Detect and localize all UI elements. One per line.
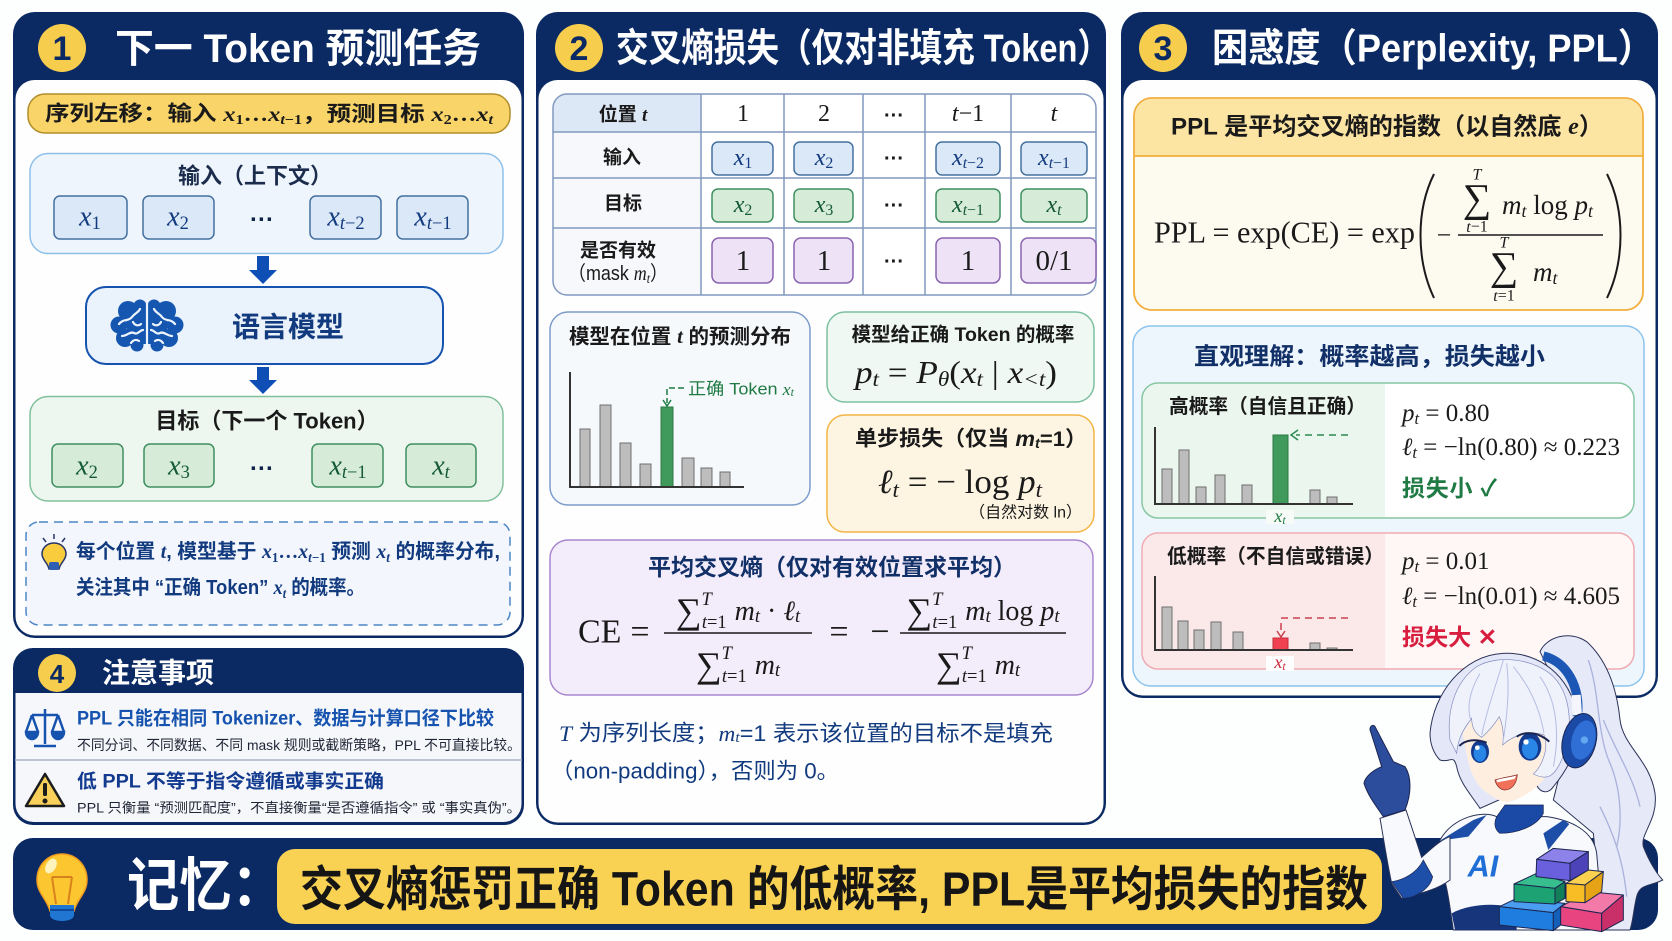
high probability values: = −ln(0.80) ≈ 0.223 (1417, 434, 1620, 460)
panel 1 number badge: 1 (53, 30, 71, 68)
high probability values: p (1400, 400, 1414, 426)
mascot raised arm (1380, 810, 1450, 898)
formula: cross entropy: log (991, 596, 1040, 626)
panel 4 heading: 注意事项 (102, 658, 214, 688)
input token x2: 2 (180, 213, 189, 233)
panel 1 number badge (38, 24, 86, 72)
note row 1 (26, 706, 521, 753)
PPL definition card (1134, 98, 1643, 310)
note line 1: 预测 (326, 540, 376, 563)
single step loss card: p (1016, 464, 1036, 500)
target token x3 (144, 444, 214, 487)
target token x2 (52, 444, 123, 487)
note line 2: 关注其中 “正确 Token” x (76, 577, 285, 599)
formula: cross entropy: ∑ (906, 591, 932, 631)
shift-left callout pill: 序列左移：输入 x (45, 102, 234, 126)
table row: target: ··· (884, 195, 904, 217)
prediction distribution card (550, 312, 810, 505)
yellow block (1566, 870, 1603, 903)
shift-left callout pill: t (280, 112, 286, 126)
high probability values: ℓ (1402, 434, 1413, 460)
single step loss card: =1） (1040, 428, 1087, 450)
input token x2 (143, 196, 214, 239)
table row: position: t−1 (952, 101, 984, 127)
correct token annotation: t (791, 387, 795, 399)
panel 3 number badge: 3 (1154, 30, 1172, 68)
shift-left callout pill: −1 (285, 112, 302, 126)
arrow: high probability pointer (1291, 430, 1348, 440)
note line 1: 每个位置 t, 模型基于 x (76, 541, 272, 563)
table row: input: x (734, 145, 744, 171)
target ellipsis: ··· (250, 456, 274, 482)
formula: cross entropy: =1 (967, 666, 987, 686)
input token x1: 1 (92, 213, 101, 233)
formula: cross entropy: T (722, 643, 734, 663)
table row: input: ··· (884, 148, 904, 170)
low probability values: ℓ (1402, 582, 1413, 610)
correct token probability card: t (873, 367, 880, 391)
table row: target: x (734, 192, 744, 218)
panel 1: next token prediction (13, 12, 524, 638)
high probability values: 损失小 ✓ (1402, 475, 1497, 501)
formula: PPL exponential: − (1437, 220, 1451, 250)
table row: mask: ） (650, 262, 668, 285)
formula: PPL exponential: m (1502, 190, 1522, 220)
high probability values: t (1414, 408, 1420, 428)
pink block (1561, 892, 1623, 932)
table row: target: 2 (744, 202, 752, 218)
table row: position: 1 (737, 101, 749, 127)
formula: cross entropy: m (995, 650, 1015, 680)
formula: cross entropy: = (630, 614, 650, 650)
input token x t-1 (397, 196, 468, 239)
input token x t-2: x (327, 202, 340, 232)
formula: cross entropy: ℓ (783, 596, 795, 626)
formula: PPL exponential: log (1526, 190, 1574, 220)
panel 4 number badge (38, 654, 76, 692)
mascot: anime AI assistant (1364, 636, 1663, 932)
table row: input: 输入 (603, 146, 641, 168)
memory statement highlight (277, 849, 1382, 924)
target token x t: t (445, 462, 451, 482)
PPL definition card: PPL 是平均交叉熵的指数（以自然底 e） (1171, 112, 1603, 140)
mascot torso (1440, 814, 1603, 930)
prediction distribution card: 模型在位置 t 的预测分布 (569, 324, 791, 348)
formula: cross entropy: T (962, 643, 974, 663)
formula: cross entropy: CE (578, 614, 621, 650)
panel 2: cross entropy (536, 12, 1110, 825)
target token x2: 2 (89, 462, 98, 482)
table row: position: t (1051, 101, 1059, 127)
formula: PPL exponential: t=1 (1493, 288, 1515, 304)
correct token annotation: 正确 Token x (688, 380, 790, 398)
formula: cross entropy: − (870, 614, 890, 650)
mascot head (1430, 653, 1602, 808)
shift-left callout pill: ，预测目标 (302, 102, 431, 126)
correct token probability card: p (855, 354, 871, 390)
table row: position: 2 (818, 101, 830, 127)
formula: cross entropy: t (932, 612, 938, 632)
note line 1: 1 (272, 550, 278, 564)
formula: cross entropy (578, 589, 1066, 686)
formula: cross entropy: t (1054, 606, 1060, 626)
note row 2 (26, 770, 521, 816)
single step loss card: t (1035, 435, 1041, 451)
input token x t-2 (310, 196, 381, 239)
target token x3: x (168, 450, 181, 482)
low probability case: 低概率（不自信或错误） (1167, 544, 1384, 568)
intuition card (1133, 326, 1644, 686)
formula: PPL exponential: ∑ (1490, 244, 1518, 288)
table row: position (599, 101, 1059, 127)
formula: cross entropy: t (775, 660, 781, 680)
high probability case (1142, 383, 1634, 527)
panel 4: notes (13, 648, 524, 825)
table row: position: ··· (884, 105, 904, 127)
low probability values: t (1414, 556, 1420, 576)
formula: PPL exponential: ∑ (1463, 176, 1491, 220)
note line 1: t (386, 550, 390, 564)
dashed explanation note (26, 522, 510, 625)
panel 1 heading: 下一 Token 预测任务 (115, 27, 481, 71)
formula: cross entropy: t (722, 666, 728, 686)
mascot pointing glove (1364, 725, 1410, 817)
formula: PPL exponential: t (1552, 268, 1558, 288)
table row: mask: （mask m (568, 263, 648, 285)
formula: cross entropy: m (755, 650, 775, 680)
bar chart: low probability (1155, 576, 1353, 650)
input ellipsis: ··· (250, 206, 274, 234)
formula: PPL exponential (1154, 166, 1620, 304)
table row: target: t (963, 202, 968, 218)
memory label: 记忆： (127, 854, 284, 918)
note line 1: 的概率分布, (390, 540, 500, 563)
formula: PPL exponential: PPL = exp(CE) = exp (1154, 214, 1415, 250)
note 1 heading: PPL 只能在相同 Tokenizer、数据与计算口径下比较 (77, 706, 494, 730)
shift-left callout pill: x (267, 102, 280, 126)
language model box (86, 287, 443, 364)
table row: input: 1 (744, 154, 752, 172)
panel 4 number badge: 4 (50, 659, 65, 689)
correct token probability card: x (1008, 354, 1022, 390)
formula: PPL exponential: t (1522, 201, 1528, 221)
table row: target: −1 (967, 202, 984, 218)
single step loss card: （自然对数 ln） (969, 504, 1082, 522)
mascot mouth (1495, 775, 1517, 790)
shift-left callout pill: … (244, 102, 268, 126)
correct token probability card (827, 312, 1094, 402)
correct token probability card: | (983, 354, 1008, 390)
icon: brain (110, 300, 184, 352)
formula: PPL exponential: t (1588, 201, 1594, 221)
shift-left callout pill: x (475, 102, 488, 126)
table row: mask: 1 (817, 245, 831, 277)
correct token probability card: t (977, 367, 984, 391)
target token x t-1 (312, 444, 383, 487)
formula: PPL exponential: T (1473, 166, 1483, 184)
target token x2: x (76, 450, 89, 482)
table row: input: −1 (1053, 154, 1070, 172)
table row: target: x (1046, 192, 1057, 218)
definition note (551, 720, 1053, 784)
definition note: T 为序列长度； m (559, 720, 734, 746)
formula: PPL exponential: T (1500, 234, 1510, 252)
alignment table (553, 94, 1096, 295)
table row: target: x (815, 192, 825, 218)
single step loss card: 单步损失（仅当 m (855, 428, 1034, 450)
correct token probability card: x (961, 354, 975, 390)
icon: balance scale (26, 709, 64, 746)
formula: cross entropy: ∑ (696, 645, 722, 685)
shift-left callout pill: 2 (444, 112, 452, 126)
note line 1: x (297, 541, 308, 563)
high probability values (1400, 400, 1620, 501)
note line 1: t (308, 550, 312, 564)
input token x t-2: −2 (345, 213, 365, 233)
panel 2 number badge (555, 24, 603, 72)
high probability values: t (1412, 442, 1417, 462)
table row: target (604, 189, 1087, 222)
formula: cross entropy: t (795, 606, 801, 626)
formula: PPL exponential: m (1533, 257, 1552, 287)
shift-left callout pill: 1 (236, 112, 244, 126)
input context group: 输入（上下文） (178, 164, 332, 188)
formula: cross entropy: t (702, 612, 708, 632)
note 1 detail: 不同分词、不同数据、不同 mask 规则或截断策略，PPL 不可直接比较。 (77, 737, 521, 753)
correct token probability card: = (879, 354, 916, 390)
formula: PPL exponential: p (1572, 190, 1588, 220)
mascot headset (1543, 656, 1602, 772)
table row: target: 3 (825, 202, 833, 218)
formula: cross entropy: ∑ (936, 645, 962, 685)
table row: mask: ··· (884, 251, 904, 273)
memory statement highlight: 交叉熵惩罚正确 Token 的低概率, PPL是平均损失的指数 (300, 864, 1368, 916)
formula: cross entropy: =1 (938, 612, 957, 632)
input token x t-1: −1 (432, 213, 452, 233)
note line 1: −1 (312, 550, 326, 564)
x t axis label red: x (1274, 652, 1282, 672)
high probability case: 高概率（自信且正确） (1169, 394, 1366, 418)
bottom memory banner (13, 838, 1658, 930)
average cross entropy card: 平均交叉熵（仅对有效位置求平均） (648, 554, 1016, 580)
model label: 语言模型 (232, 312, 344, 342)
input token x t-2: t (340, 213, 346, 233)
target group (30, 396, 503, 501)
single step loss card: = − log (899, 464, 1018, 500)
formula: cross entropy: =1 (707, 612, 727, 632)
low probability values: 损失大 ✕ (1402, 624, 1497, 650)
low probability values (1400, 548, 1620, 650)
definition note: （non-padding），否则为 0。 (551, 758, 839, 784)
formula: cross entropy: = (829, 614, 849, 650)
input token x1: x (79, 202, 92, 232)
note 2 detail: PPL 只衡量 “预测匹配度”，不直接衡量“是否遵循指令” 或 “事实真伪”。 (77, 800, 521, 816)
table row: input: 2 (825, 154, 833, 172)
formula: cross entropy: m (965, 596, 985, 626)
formula: cross entropy: ∑ (676, 591, 702, 631)
table row: mask: 1 (961, 245, 975, 277)
average cross entropy card (550, 540, 1093, 695)
low probability values: = −ln(0.01) ≈ 4.605 (1417, 582, 1620, 610)
table row: target: t (1057, 202, 1062, 218)
shift-left callout pill (28, 94, 510, 133)
formula: cross entropy: m (735, 596, 755, 626)
table row: mask (568, 238, 1096, 286)
panel 2 heading: 交叉熵损失（仅对非填充 Token） (616, 28, 1110, 70)
table row: input: t (1049, 154, 1054, 172)
target token x t-1: x (329, 450, 342, 482)
panel 2 number badge: 2 (570, 30, 588, 68)
target token x t-1: −1 (347, 462, 367, 482)
formula: cross entropy: t (962, 666, 968, 686)
formula: cross entropy: T (932, 589, 944, 609)
table row: input: x (952, 145, 963, 171)
input token x t-1: x (414, 202, 427, 232)
table row: input: x (815, 145, 825, 171)
correct token annotation (663, 380, 795, 406)
x t axis label red (1266, 652, 1294, 673)
formula: cross entropy: t (755, 606, 761, 626)
bar chart: predicted distribution (570, 372, 744, 487)
green block (1514, 873, 1565, 904)
input context group (30, 154, 503, 254)
panel 3: perplexity (1121, 12, 1658, 698)
shift-left callout pill: t (488, 112, 494, 126)
formula: cross entropy: =1 (727, 666, 747, 686)
x t axis label green (1266, 506, 1294, 527)
correct token probability card: ) (1045, 354, 1057, 390)
low probability values: = 0.01 (1419, 548, 1489, 574)
input token x1 (54, 196, 127, 239)
arrow: input to model (249, 256, 277, 284)
formula: cross entropy: t (985, 606, 991, 626)
note line 1: … (278, 541, 298, 563)
mascot ponytail (1540, 636, 1663, 930)
formula: cross entropy: t (1015, 660, 1021, 680)
shift-left callout pill: x (430, 102, 444, 126)
blue block (1499, 898, 1565, 931)
definition note: =1 表示该位置的目标不是填充 (740, 720, 1053, 746)
low probability values: p (1400, 548, 1414, 574)
note line 2: t (283, 586, 286, 600)
note 2 heading: 低 PPL 不等于指令遵循或事实正确 (77, 770, 384, 792)
correct token probability card: 模型给正确 Token 的概率 (852, 323, 1074, 346)
low probability case (1142, 533, 1634, 673)
shift-left callout pill: … (452, 102, 476, 126)
formula: PPL exponential: t−1 (1466, 218, 1488, 236)
purple block (1536, 848, 1588, 881)
panel 3 number badge (1139, 24, 1187, 72)
table row: mask: 是否有效 (580, 240, 656, 262)
target group: 目标（下一个 Token） (155, 408, 379, 434)
mascot collar (1495, 805, 1543, 833)
target token x3: 3 (181, 462, 190, 482)
high probability values: = 0.80 (1419, 400, 1489, 426)
mascot AI chest label: AI (1467, 849, 1500, 883)
table row: position: 位置 t (599, 102, 648, 126)
table row: input: x (1038, 145, 1049, 171)
icon: large light bulb (37, 854, 87, 921)
x t axis label green: x (1274, 506, 1282, 526)
input token x t-1: t (427, 213, 433, 233)
table row: mask: t (647, 270, 650, 286)
formula: cross entropy: T (702, 589, 714, 609)
table row: input (603, 142, 1087, 175)
target token x t-1: t (342, 462, 348, 482)
x t axis label red: t (1282, 659, 1286, 673)
table row: target: 目标 (604, 192, 642, 214)
formula: cross entropy: · (760, 596, 783, 626)
target token x t: x (432, 450, 445, 482)
icon: small light bulb (42, 534, 66, 570)
correct token probability card: θ (938, 367, 949, 391)
single step loss card: t (893, 476, 900, 502)
single step loss card: ℓ (878, 464, 893, 500)
x t axis label green: t (1282, 513, 1286, 527)
mascot eyes (1459, 733, 1549, 763)
table row: input: t (963, 154, 968, 172)
icon: warning triangle (26, 774, 64, 806)
table row: mask: 1 (736, 245, 750, 277)
colourful building blocks (1499, 848, 1623, 932)
arrow: model to target (249, 367, 277, 394)
table row: mask: 0/1 (1035, 245, 1073, 277)
single step loss card: t (1036, 476, 1043, 502)
formula: cross entropy: p (1038, 596, 1054, 626)
note line 2: 的概率。 (286, 576, 365, 599)
target token x t (406, 444, 476, 487)
bar chart: high probability (1155, 427, 1353, 504)
definition note: t (735, 730, 741, 746)
intuition card: 直观理解：概率越高，损失越小 (1194, 344, 1545, 370)
table row: target: x (952, 192, 963, 218)
note line 1: x (375, 541, 386, 563)
low probability values: t (1412, 592, 1417, 610)
correct token probability card: <t (1023, 367, 1047, 391)
table row: input: −2 (967, 154, 984, 172)
correct token probability card: ( (949, 354, 961, 390)
input token x2: x (167, 202, 180, 232)
correct token probability card: P (916, 354, 936, 390)
single step loss card (827, 415, 1094, 532)
arrow: low probability pointer (1277, 618, 1348, 637)
